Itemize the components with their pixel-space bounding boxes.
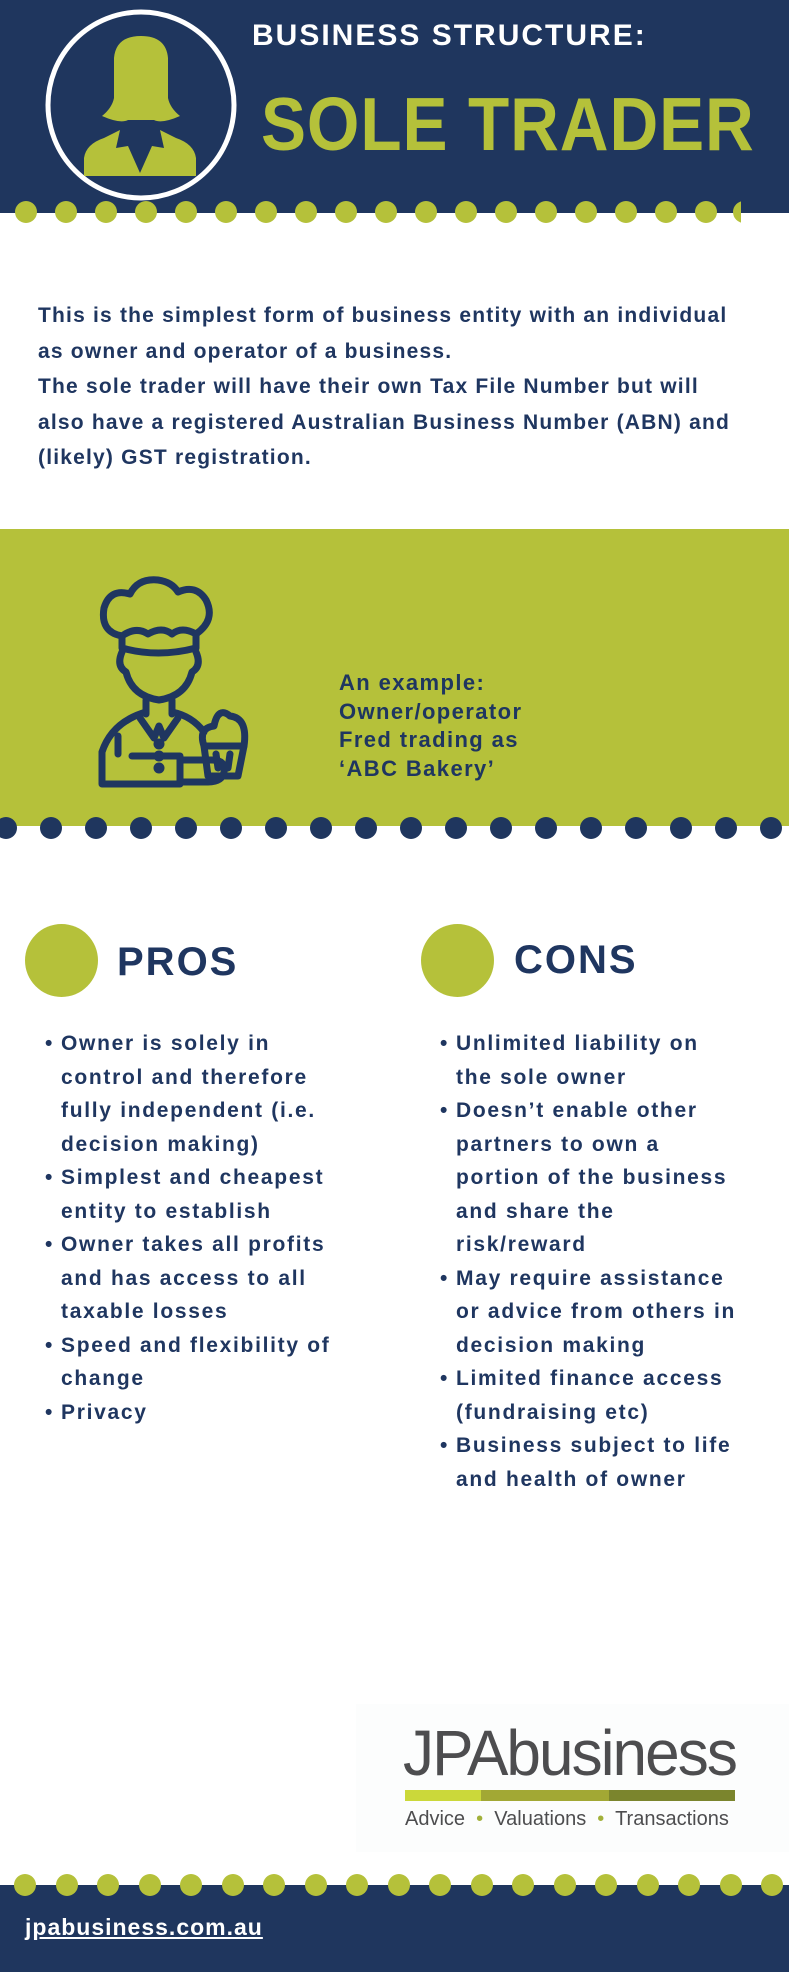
footer url: jpabusiness.com.au [25, 1914, 263, 1940]
cons heading: CONS [514, 938, 638, 982]
navy dots under band [0, 817, 782, 839]
cons list: risk/reward [456, 1233, 587, 1256]
icon: baker [98, 576, 248, 788]
intro paragraph [38, 304, 730, 469]
logo: JPAbusiness: Advice • Valuations • Transactions [405, 1808, 729, 1830]
cons list: Limited finance access [456, 1367, 723, 1390]
intro paragraph: also have a registered Australian Business Number (ABN) and [38, 410, 730, 434]
pros list: change [61, 1367, 145, 1390]
intro paragraph: This is the simplest form of business entity with an individual [38, 304, 727, 327]
pros list: Speed and flexibility of [61, 1334, 331, 1356]
pros list: entity to establish [61, 1200, 272, 1222]
pros list: control and therefore [61, 1066, 308, 1088]
pros list: and has access to all [61, 1266, 307, 1290]
pros list: fully independent (i.e. [61, 1099, 316, 1122]
intro paragraph: The sole trader will have their own Tax File Number but will [38, 375, 699, 398]
title: business structure: BUSINESS STRUCTURE: [252, 19, 647, 52]
logo: JPAbusiness: JPAbusiness [403, 1717, 736, 1789]
pros list: Privacy [61, 1400, 148, 1424]
intro paragraph: (likely) GST registration. [38, 446, 312, 469]
text: example: ‘ABC Bakery’ [339, 756, 495, 780]
pros list: Owner takes all profits [61, 1233, 325, 1256]
cons list: portion of the business [456, 1166, 727, 1189]
footer band [0, 1885, 789, 1972]
text: example: Fred trading as [339, 727, 519, 752]
cons list: partners to own a [456, 1132, 660, 1156]
cons list: and share the [456, 1200, 615, 1222]
icon: cons circle [421, 924, 494, 997]
footer dots [14, 1874, 783, 1896]
cons list: Business subject to life [456, 1434, 731, 1457]
pros list: Simplest and cheapest [61, 1166, 324, 1189]
pros heading: PROS [117, 940, 238, 984]
cons list [440, 1032, 736, 1490]
panel: example band [0, 529, 789, 826]
pros list: Owner is solely in [61, 1032, 270, 1055]
cons list: Doesn’t enable other [456, 1099, 698, 1122]
cons list: (fundraising etc) [456, 1400, 649, 1424]
icon: pros circle [25, 924, 98, 997]
pros list [46, 1032, 331, 1424]
text: example: Owner/operator [339, 698, 522, 724]
logo: JPAbusiness [356, 1704, 789, 1852]
pros list: decision making) [61, 1132, 260, 1156]
cons list: decision making [456, 1334, 646, 1356]
text: example: An example: [339, 670, 485, 695]
pros heading [25, 924, 238, 997]
cons list: May require assistance [456, 1266, 725, 1290]
cons list: the sole owner [456, 1066, 627, 1088]
cons list: or advice from others in [456, 1300, 736, 1323]
header dots [15, 201, 741, 223]
header band [0, 0, 789, 213]
title: sole trader: SOLE TRADER [261, 82, 755, 166]
pros list: taxable losses [61, 1300, 228, 1323]
text: example [339, 670, 522, 780]
cons heading [421, 924, 638, 997]
intro paragraph: as owner and operator of a business. [38, 340, 452, 362]
cons list: Unlimited liability on [456, 1032, 699, 1055]
cons list: and health of owner [456, 1468, 687, 1490]
icon: businesswoman in circle [46, 10, 236, 200]
